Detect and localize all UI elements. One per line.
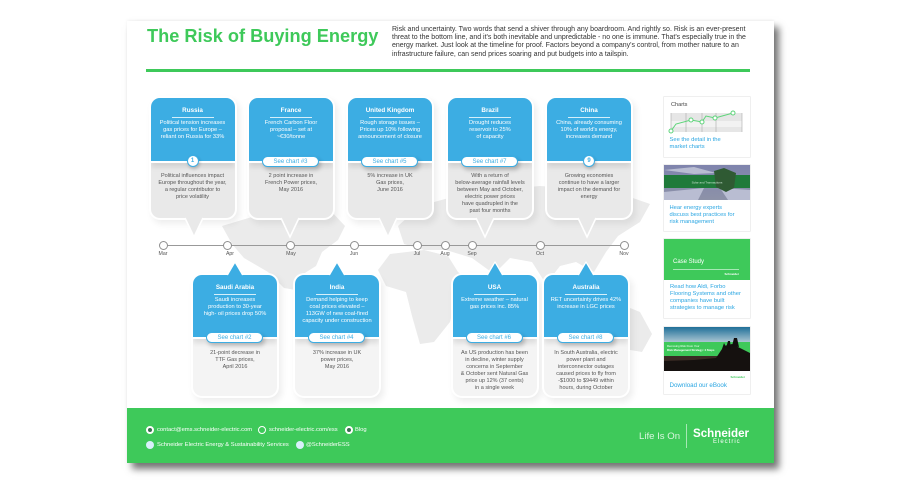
- icon: linkedin: [146, 441, 154, 449]
- card: India: [293, 264, 384, 402]
- page sheet: [127, 21, 774, 463]
- text: Nov: [619, 251, 629, 257]
- card: USA: in decline, winter supply: [465, 357, 524, 363]
- card: Brazil: have quadrupled in the: [462, 201, 518, 207]
- panel: case study: Case Study: [673, 259, 704, 265]
- intro text: energy market. Just look at the timeline for proof. Factors beyond a company's control, from mother nature to an: [392, 42, 739, 49]
- footer band: [127, 408, 774, 463]
- card: India: See chart #4: [319, 335, 354, 341]
- card: Brazil: past four months: [470, 208, 510, 214]
- card: USA: [451, 261, 542, 402]
- card: China: impact on the demand for: [558, 187, 620, 193]
- card: Australia: increase in LGC prices: [557, 304, 615, 310]
- card: Brazil: With a return of: [471, 173, 509, 179]
- card: Saudi Arabia: Saudi Arabia: [216, 284, 254, 291]
- footer contacts: Schneider Electric Energy & Sustainability Services: [157, 442, 289, 448]
- card: India: coal prices elevated –: [309, 304, 364, 310]
- card: Russia: Russia: [182, 107, 203, 114]
- footer contacts: [146, 426, 367, 449]
- card: Australia: [543, 261, 633, 402]
- icon: twitter: [296, 441, 304, 449]
- timeline: [168, 245, 620, 246]
- panel: eBook: Schneider: [730, 375, 745, 379]
- card: China: increases demand: [566, 134, 612, 140]
- image: climbers cover: Risk Management Strategy: 4 Steps: [667, 348, 715, 352]
- card: Russia: price volatility: [176, 194, 209, 200]
- card: France: French Carbon Floor: [265, 120, 317, 126]
- card: Saudi Arabia: See chart #2: [217, 335, 252, 341]
- header rule: [146, 69, 750, 72]
- intro text: [392, 26, 746, 58]
- chart: mini line: [668, 110, 742, 134]
- card: China: energy: [581, 194, 597, 200]
- card: France: ~€30/tonne: [277, 134, 305, 140]
- card: Australia: caused prices to fly from: [556, 371, 616, 377]
- card: Saudi Arabia: production to 30-year: [208, 304, 262, 310]
- card: Russia: 1: [191, 158, 194, 164]
- card: India: India: [330, 284, 344, 291]
- card: United Kingdom: June 2016: [377, 187, 403, 193]
- footer logo: Life Is On: [639, 431, 680, 442]
- panel: market charts: Charts: [671, 102, 687, 108]
- card: Russia: Political influences impact: [161, 173, 224, 179]
- panel: case study: [664, 239, 750, 318]
- card: China: 10% of world's energy,: [561, 127, 617, 133]
- footer contacts: Blog: [355, 426, 367, 432]
- intro text: threat to the bottom line, and it's both inevitable and unpredictable - no one is immune. That's especially true in the: [392, 34, 746, 41]
- icon: email: [146, 426, 154, 434]
- intro text: infrastructure failure, can send prices soaring and put budgets into a tailspin.: [392, 51, 629, 58]
- text: Apr: [226, 251, 234, 257]
- card: Brazil: of capacity: [476, 134, 504, 140]
- card: India: May 2016: [325, 364, 349, 370]
- card: India: 37% increase in UK: [313, 350, 361, 356]
- card: Saudi Arabia: [193, 264, 282, 402]
- card: Australia: Australia: [573, 284, 599, 291]
- card: Brazil: See chart #7: [472, 158, 507, 164]
- card: United Kingdom: announcement of closure: [358, 134, 422, 140]
- card: India: capacity under construction: [302, 318, 372, 324]
- footer logo: [639, 424, 749, 448]
- panel: eBook: Download our eBook: [670, 382, 727, 389]
- world map background: [222, 186, 652, 352]
- card: United Kingdom: Rough storage issues –: [360, 120, 420, 126]
- footer contacts: @SchneiderESS: [306, 442, 350, 448]
- card: Australia: interconnector outages: [558, 364, 614, 370]
- card: Russia: gas prices for Europe –: [163, 127, 222, 133]
- card: China: Growing economies: [565, 173, 613, 179]
- panel: energy experts: discuss best practices for: [670, 212, 735, 218]
- card: Saudi Arabia: TTF Gas prices,: [215, 357, 255, 363]
- card: United Kingdom: Gas prices,: [376, 180, 404, 186]
- card: Australia: hours, during October: [559, 385, 613, 391]
- card: USA: gas prices inc. 85%: [470, 304, 519, 310]
- card: China: [545, 98, 636, 238]
- card: France: 2 point increase in: [269, 173, 313, 179]
- card: China: continue to have a larger: [559, 180, 619, 186]
- image: webinar banner: [664, 165, 750, 200]
- card: United Kingdom: [348, 98, 437, 234]
- card: USA: USA: [488, 284, 501, 291]
- card: China: 9: [587, 158, 591, 164]
- card: Saudi Arabia: April 2016: [223, 364, 247, 370]
- card: USA: As US production has been: [461, 350, 528, 356]
- text: Sep: [467, 251, 477, 257]
- icon: blog: [345, 426, 353, 434]
- image: webinar banner: Solar and Transactions: [692, 180, 723, 184]
- card: Russia: reliant on Russia for 33%: [161, 134, 224, 140]
- card: Brazil: Brazil: [481, 107, 499, 114]
- text: Mar: [159, 251, 167, 257]
- panel: case study: Flooring Systems and other: [670, 290, 741, 296]
- card: France: May 2016: [279, 187, 303, 193]
- card: United Kingdom: United Kingdom: [366, 107, 414, 114]
- card: Saudi Arabia: 21-point decrease in: [210, 350, 260, 356]
- card: Brazil: Drought reduces: [469, 120, 511, 126]
- card: USA: & October sent Natural Gas: [461, 371, 528, 377]
- card: Brazil: between May and October,: [457, 187, 523, 193]
- card: United Kingdom: 5% increase in UK: [367, 173, 413, 179]
- card: China: China, already consuming: [556, 120, 622, 126]
- icon: web: [258, 426, 266, 434]
- card: China: China: [580, 107, 598, 114]
- footer contacts: contact@ems.schneider-electric.com: [157, 426, 252, 432]
- panel: case study: companies have built: [670, 298, 724, 304]
- card: Russia: Europe throughout the year,: [158, 180, 227, 186]
- card: USA: See chart #6: [477, 335, 511, 341]
- card: Brazil: [446, 98, 537, 238]
- card: Brazil: electric power prices: [465, 194, 515, 200]
- card: USA: price up 12% (37 cents): [465, 378, 524, 384]
- card: Russia: [151, 98, 240, 234]
- image: climbers cover: [664, 327, 750, 371]
- panel: case study: Schneider: [724, 272, 739, 276]
- title: The Risk of Buying Energy: [147, 26, 378, 46]
- panel: energy experts: [664, 165, 750, 231]
- card: USA: Extreme weather – natural: [461, 297, 528, 303]
- text: Jun: [350, 251, 358, 257]
- card: Australia: In South Australia, electric: [554, 350, 618, 356]
- panel: case study: Read how Aldi, Forbo: [670, 284, 725, 290]
- card: USA: in a single week: [475, 385, 514, 391]
- image: climbers cover: Removing Risk From Your: [667, 344, 700, 348]
- footer contacts: schneider-electric.com/ess: [269, 426, 338, 432]
- footer logo: Electric: [713, 439, 741, 445]
- intro text: Risk and uncertainty. Two words that send a shiver through any boardroom. And rightly so. Risk is an ever-present: [392, 26, 745, 32]
- card: France: proposal – set at: [270, 127, 312, 133]
- text: Aug: [440, 251, 450, 257]
- card: Australia: See chart #8: [568, 335, 603, 341]
- card: Brazil: reservoir to 25%: [469, 127, 511, 133]
- card: Brazil: below-average rainfall levels: [455, 180, 525, 186]
- card: France: [249, 98, 338, 238]
- panel: energy experts: risk management: [670, 218, 714, 224]
- card: India: 113GW of new coal-fired: [306, 311, 368, 317]
- card: France: France: [281, 107, 301, 114]
- card: Russia: Political tension increases: [160, 120, 225, 126]
- card: Australia: power plant and: [566, 357, 606, 363]
- text: May: [286, 251, 296, 257]
- panel: market charts: See the detail in the: [670, 136, 721, 142]
- text: Jul: [414, 251, 420, 257]
- card: France: French Power prices,: [265, 180, 317, 186]
- panel: market charts: [664, 97, 750, 157]
- card: Australia: RET uncertainty drives 42%: [551, 297, 621, 303]
- card: Saudi Arabia: high- oil prices drop 50%: [204, 311, 266, 317]
- text: Oct: [536, 251, 544, 257]
- card: Russia: a regular contributor to: [165, 187, 220, 193]
- card: United Kingdom: See chart #5: [372, 158, 407, 164]
- card: India: power prices,: [321, 357, 353, 363]
- panel: eBook: [664, 327, 750, 394]
- card: India: Demand helping to keep: [306, 297, 368, 303]
- panel: case study: strategies to manage risk: [670, 304, 735, 310]
- card: Saudi Arabia: Saudi increases: [215, 297, 255, 303]
- panel: energy experts: Hear energy experts: [670, 204, 722, 210]
- card: Australia: -$1000 to $9449 within: [558, 378, 614, 384]
- footer logo: Schneider: [693, 426, 749, 440]
- card: France: See chart #3: [273, 158, 308, 164]
- card: USA: concerns in September: [466, 364, 523, 370]
- panel: market charts: market charts: [670, 144, 705, 150]
- card: United Kingdom: Prices up 10% following: [360, 127, 420, 133]
